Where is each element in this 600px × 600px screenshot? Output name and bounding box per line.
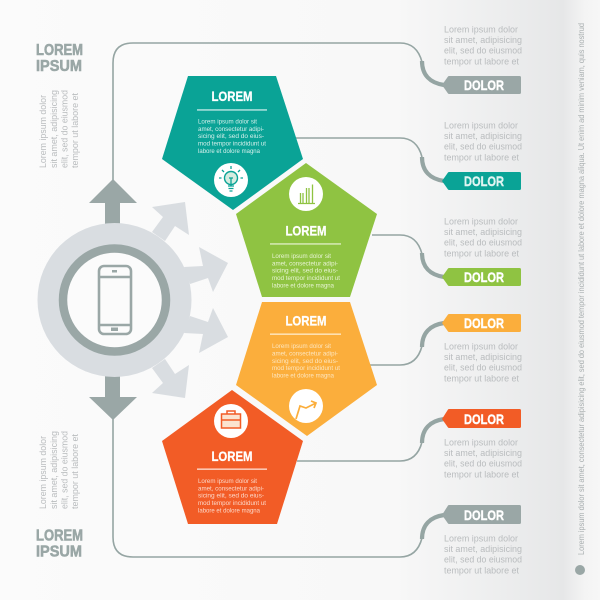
tag: orange [442,314,521,332]
panel: teal pentagon: sicing elit, sed do eius- [198,133,264,140]
heading: top left [36,42,83,75]
heading: top left: LOREM [36,42,83,59]
tag: orange: DOLOR [464,315,504,331]
central hub with phone [38,223,192,377]
text block: right 6: tempor ut labore et [444,565,519,576]
panel: teal pentagon: LOREM [212,88,252,104]
panel: orange pentagon: Lorem ipsum dolor sit [272,343,331,350]
text block: right 4 [444,342,522,384]
panel: red pentagon [162,390,303,524]
connector: teal pentagon to teal tag [295,138,444,181]
panel: red pentagon: labore et dolore magna [198,507,260,514]
text block: rotated lower left: tempor ut labore et [70,434,81,509]
panel: red pentagon: LOREM [212,448,252,464]
text block: right 6 [444,534,522,576]
connector: orange pentagon to orange tag [368,323,444,365]
text block: rotated lower left: elit, sed do eiusmod [60,431,70,509]
tag: green [442,268,521,286]
panel: teal pentagon: amet, consectetur adipi- [198,126,264,133]
heading: bottom left: IPSUM [36,544,82,560]
panel: green pentagon: labore et dolore magna [272,282,334,289]
tag: red: DOLOR [464,411,504,427]
panel: red pentagon: Lorem ipsum dolor sit [198,478,257,485]
connector: top line to grey tag [113,43,444,182]
text block: right 5: elit, sed do eiusmod [444,459,522,470]
text block: rotated upper left: Lorem ipsum dolor [38,95,49,168]
text block: right 4: sit amet, adipisicing [444,352,522,363]
panel: green pentagon: LOREM [286,222,326,238]
text block: right 5: Lorem ipsum dolor [444,438,518,448]
heading: bottom left: LOREM [36,528,83,544]
tag: green: DOLOR [464,269,504,285]
panel: green pentagon: sicing elit, sed do eius- [272,268,338,275]
text block: right 1: sit amet, adipisicing [444,35,522,46]
panel: orange pentagon: labore et dolore magna [272,372,334,380]
panel: green pentagon [236,163,377,297]
text block: right 3 [444,216,522,259]
down arrow [89,375,137,420]
tag: teal: DOLOR [464,173,504,189]
up arrow [89,179,137,226]
text block: rotated upper left [38,90,81,168]
connector: bottom line to grey tag [113,418,444,557]
text block: right 2: elit, sed do eiusmod [444,142,522,153]
tag: teal [442,172,521,190]
panel: teal pentagon: Lorem ipsum dolor sit [198,118,257,126]
panel: red pentagon: sicing elit, sed do eius- [198,493,264,500]
text block: right 2: Lorem ipsum dolor [444,120,518,132]
text block: right 1 [444,24,522,67]
panel: orange pentagon [236,302,377,436]
icon: light bulb [214,163,248,197]
text block: right 5: sit amet, adipisicing [444,448,522,459]
panel: green pentagon: mod tempor incididunt ut [272,275,340,282]
panel: red pentagon: amet, consectetur adipi- [198,485,264,492]
text block: right 3: Lorem ipsum dolor [444,216,518,228]
icon: smartphone [99,266,131,334]
text block: rotated upper left: tempor ut labore et [70,93,81,168]
tag: grey bottom: DOLOR [464,507,504,523]
tag: grey top [442,76,521,94]
side strip dot [575,565,585,575]
heading: top left: IPSUM [36,58,82,75]
text block: right 4: elit, sed do eiusmod [444,363,522,374]
text block: right 3: tempor ut labore et [444,248,519,259]
text block: rotated upper left: sit amet, adipisicing [49,90,60,168]
connector: green pentagon to green tag [372,235,444,277]
text block: right 2: tempor ut labore et [444,152,519,163]
connector: red pentagon to red tag [297,419,444,461]
panel: teal pentagon: labore et dolore magna [198,148,260,155]
panel: red pentagon: mod tempor incididunt ut [198,500,266,507]
text block: right 5: tempor ut labore et [444,469,519,480]
text block: rotated lower left [38,431,81,509]
panel: orange pentagon: LOREM [286,312,326,328]
text block: right 1: elit, sed do eiusmod [444,46,522,57]
tag: grey bottom [442,505,521,524]
text block: right 6: Lorem ipsum dolor [444,534,518,544]
text block: right 6: elit, sed do eiusmod [444,555,522,566]
tag: red [442,409,521,428]
text block: right 2: sit amet, adipisicing [444,131,522,142]
heading: bottom left [36,528,83,560]
tag: grey top: DOLOR [464,77,504,93]
text block: right 6: sit amet, adipisicing [444,544,522,555]
text block: rotated upper left: elit, sed do eiusmod [60,90,70,168]
panel: orange pentagon: amet, consectetur adipi- [272,350,338,358]
text block: rotated lower left: Lorem ipsum dolor [38,436,49,509]
text block: right 5 [444,438,522,480]
text block: right 4: tempor ut labore et [444,373,519,384]
text block: rotated lower left: sit amet, adipisicing [49,431,60,509]
panel: orange pentagon: sicing elit, sed do eius- [272,358,338,365]
text block: right 1: Lorem ipsum dolor [444,24,518,36]
text block: right 3: sit amet, adipisicing [444,227,522,238]
icon: briefcase [214,404,248,438]
text block: right 4: Lorem ipsum dolor [444,342,518,352]
text block: right 3: elit, sed do eiusmod [444,238,522,249]
panel: orange pentagon: mod tempor incididunt ut [272,365,340,372]
text block: right 1: tempor ut labore et [444,56,519,67]
panel: teal pentagon: mod tempor incididunt ut [198,140,266,148]
panel: green pentagon: amet, consectetur adipi- [272,260,338,267]
light arrows fanning from the hub [152,202,228,398]
panel: teal pentagon [162,76,303,210]
icon: trend arrow [289,389,323,423]
icon: bar chart [289,177,323,211]
panel: green pentagon: Lorem ipsum dolor sit [272,253,331,260]
text block: right 2 [444,120,522,163]
